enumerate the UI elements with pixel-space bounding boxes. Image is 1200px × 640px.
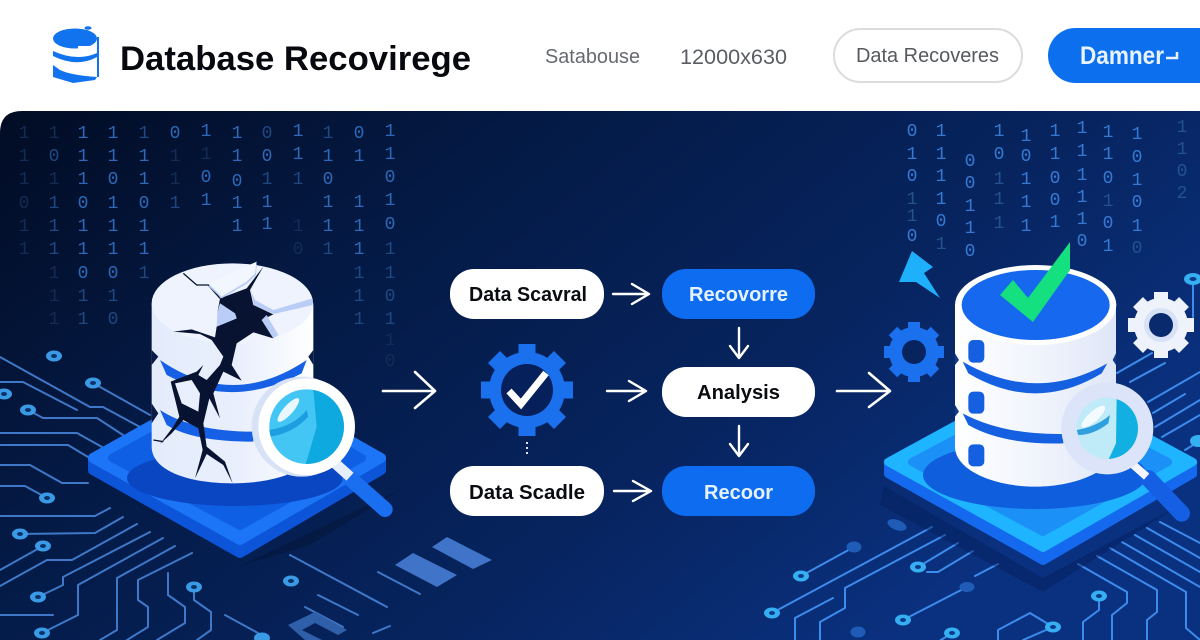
binary rain right: 1 <box>1077 188 1087 208</box>
binary rain left: 1 <box>139 124 149 144</box>
binary rain left: 1 <box>232 217 242 237</box>
binary rain right: 0 <box>1050 191 1060 211</box>
binary rain left: 1 <box>201 145 211 165</box>
binary rain left: 1 <box>293 145 303 165</box>
icon: intact database <box>955 265 1116 487</box>
binary rain right: 0 <box>936 212 946 232</box>
circuit nodes left <box>0 350 299 640</box>
blue band lower <box>160 410 253 442</box>
binary rain right: 1 <box>907 207 917 227</box>
arrow <box>614 481 651 501</box>
binary rain left: 1 <box>49 217 59 237</box>
pill: Recoor <box>662 466 815 516</box>
binary rain left: 1 <box>19 147 29 167</box>
binary rain left: 1 <box>49 310 59 330</box>
binary rain left: 1 <box>49 240 59 260</box>
binary rain right: 0 <box>1177 162 1187 182</box>
circuit nodes right <box>764 273 1200 638</box>
binary rain left: 1 <box>170 170 180 190</box>
binary rain right: 1 <box>994 214 1004 234</box>
binary rain right: 1 <box>1021 193 1031 213</box>
pill: Data Scavral: Data Scavral <box>469 284 587 306</box>
binary rain left: 1 <box>323 240 333 260</box>
binary rain left: 1 <box>139 170 149 190</box>
binary rain left: 1 <box>49 194 59 214</box>
nav label: dimensions: 12000x630 <box>680 46 787 69</box>
binary rain left: 1 <box>385 240 395 260</box>
binary rain right: 1 <box>1132 217 1142 237</box>
binary rain left: 1 <box>108 194 118 214</box>
binary rain right: 1 <box>994 190 1004 210</box>
binary rain left: 0 <box>385 352 395 372</box>
binary rain right: 1 <box>1103 123 1113 143</box>
binary rain left: 0 <box>385 287 395 307</box>
binary rain right: 0 <box>907 167 917 187</box>
binary rain right: 0 <box>1132 239 1142 259</box>
binary rain right: 1 <box>1132 171 1142 191</box>
binary rain left: 1 <box>78 217 88 237</box>
binary rain right: 1 <box>936 235 946 255</box>
blue band lower <box>963 413 1063 443</box>
binary rain right: 1 <box>1021 217 1031 237</box>
nav label: Satabouse: Satabouse <box>545 46 640 68</box>
binary rain left: 1 <box>78 124 88 144</box>
binary rain right: 1 <box>1103 237 1113 257</box>
binary rain left: 1 <box>49 124 59 144</box>
binary rain left: 1 <box>262 170 272 190</box>
binary rain left <box>19 122 395 372</box>
binary rain right: 1 <box>907 190 917 210</box>
binary rain left: 1 <box>385 264 395 284</box>
binary rain right: 1 <box>936 190 946 210</box>
binary rain right: 0 <box>1132 148 1142 168</box>
binary rain right: 1 <box>936 122 946 142</box>
binary rain left: 0 <box>232 172 242 192</box>
binary rain left: 1 <box>354 193 364 213</box>
arrow <box>837 373 890 407</box>
binary rain left: 1 <box>323 193 333 213</box>
binary rain left: 0 <box>78 264 88 284</box>
binary rain left: 0 <box>385 215 395 235</box>
pill: Recovorre: Recovorre <box>689 284 788 306</box>
icon: cracked database <box>152 262 313 483</box>
binary rain right: 1 <box>1103 145 1113 165</box>
binary rain right: 1 <box>907 145 917 165</box>
binary rain left: 1 <box>78 147 88 167</box>
binary rain left: 0 <box>262 147 272 167</box>
binary rain left: 1 <box>354 287 364 307</box>
binary rain left: 0 <box>139 194 149 214</box>
title: Database Recovirege <box>120 40 471 78</box>
binary rain left: 0 <box>19 194 29 214</box>
binary rain right: 0 <box>994 145 1004 165</box>
binary rain left: 1 <box>108 240 118 260</box>
binary rain right: 1 <box>994 170 1004 190</box>
binary rain right: 1 <box>1077 166 1087 186</box>
binary rain right: 0 <box>1103 169 1113 189</box>
binary rain right: 1 <box>1021 170 1031 190</box>
pill: Data Scadle <box>450 466 604 516</box>
pill: Data Scavral <box>450 269 604 319</box>
binary rain right: 1 <box>1021 127 1031 147</box>
binary rain left: 1 <box>232 194 242 214</box>
binary rain right: 1 <box>1050 145 1060 165</box>
binary rain left: 1 <box>201 122 211 142</box>
binary rain right: 0 <box>907 227 917 247</box>
binary rain left: 1 <box>232 147 242 167</box>
arrow <box>607 381 646 401</box>
binary rain left: 1 <box>78 287 88 307</box>
binary rain left: 1 <box>170 194 180 214</box>
filled button <box>1048 28 1200 83</box>
binary rain left: 1 <box>19 124 29 144</box>
binary rain left: 1 <box>293 122 303 142</box>
binary rain left: 1 <box>354 264 364 284</box>
circuit traces left <box>0 357 420 640</box>
binary rain left: 1 <box>78 240 88 260</box>
icon: magnifier right <box>1061 382 1182 513</box>
binary rain right: 1 <box>1103 192 1113 212</box>
binary rain right: 1 <box>994 122 1004 142</box>
blue band upper <box>160 360 307 392</box>
binary rain left: 1 <box>354 147 364 167</box>
binary rain left: 1 <box>354 310 364 330</box>
binary rain left: 1 <box>78 310 88 330</box>
binary rain right: 1 <box>965 197 975 217</box>
binary rain right: 0 <box>965 174 975 194</box>
binary rain left: 0 <box>108 310 118 330</box>
binary rain right: 1 <box>936 167 946 187</box>
binary rain left: 1 <box>323 147 333 167</box>
binary rain right: 1 <box>1177 140 1187 160</box>
binary rain left: 1 <box>49 287 59 307</box>
filled button: Damner <box>1080 42 1164 70</box>
binary rain left: 1 <box>49 264 59 284</box>
binary rain left: 1 <box>139 217 149 237</box>
binary rain right: 0 <box>1103 214 1113 234</box>
binary rain left: 0 <box>385 168 395 188</box>
binary rain left: 1 <box>108 287 118 307</box>
dotted connector <box>526 442 528 456</box>
binary rain left: 1 <box>108 124 118 144</box>
binary rain right: 2 <box>1177 184 1187 204</box>
broken shard <box>175 380 200 412</box>
binary rain right: 1 <box>1050 213 1060 233</box>
binary rain left: 1 <box>293 170 303 190</box>
icon: database logo <box>53 26 99 83</box>
binary rain right: 1 <box>936 145 946 165</box>
binary rain left: 1 <box>385 191 395 211</box>
binary rain right: 0 <box>965 152 975 172</box>
pill: Recoor: Recoor <box>704 482 773 504</box>
binary rain left: 1 <box>385 331 395 351</box>
binary rain left: 0 <box>354 124 364 144</box>
crack shard shading <box>208 264 313 338</box>
arrow <box>613 284 649 304</box>
binary rain left: 1 <box>354 240 364 260</box>
binary rain right: 1 <box>1077 210 1087 230</box>
binary rain left: 0 <box>201 168 211 188</box>
crack fissures <box>160 267 273 483</box>
binary rain right: 1 <box>1077 142 1087 162</box>
binary rain right: 1 <box>965 219 975 239</box>
binary rain left: 1 <box>354 217 364 237</box>
icon: blue gear <box>884 322 944 382</box>
binary rain left: 1 <box>201 191 211 211</box>
binary rain right: 1 <box>1132 125 1142 145</box>
pill: Analysis <box>662 367 815 417</box>
binary rain right: 1 <box>1050 122 1060 142</box>
binary rain left: 0 <box>293 240 303 260</box>
binary rain right: 0 <box>1021 147 1031 167</box>
binary rain right: 1 <box>1077 119 1087 139</box>
binary rain left: 1 <box>139 147 149 167</box>
binary rain left: 1 <box>385 145 395 165</box>
binary rain left: 1 <box>139 264 149 284</box>
platform: damaged database base <box>93 377 400 566</box>
icon: white gear <box>1128 292 1194 358</box>
icon: gear with check <box>481 344 573 436</box>
blue band upper <box>963 362 1107 393</box>
binary rain left: 1 <box>262 215 272 235</box>
outline button <box>834 29 1022 82</box>
binary rain left: 0 <box>170 124 180 144</box>
binary rain left: 0 <box>262 124 272 144</box>
binary rain right: 1 <box>1177 118 1187 138</box>
binary rain left: 1 <box>385 310 395 330</box>
binary rain left: 1 <box>170 147 180 167</box>
binary rain left: 1 <box>262 193 272 213</box>
binary rain left: 1 <box>139 240 149 260</box>
binary rain right: 0 <box>1050 169 1060 189</box>
drive slots <box>968 340 984 466</box>
arrow: into workflow <box>383 372 435 408</box>
binary rain left: 1 <box>232 124 242 144</box>
binary rain left: 1 <box>19 240 29 260</box>
icon: cursor arrow <box>899 251 940 298</box>
binary rain left: 0 <box>323 170 333 190</box>
pill: Analysis: Analysis <box>697 382 780 404</box>
binary rain right: 0 <box>965 242 975 262</box>
arrow <box>730 426 748 456</box>
icon: magnifier left <box>252 377 385 509</box>
arrow <box>730 328 748 358</box>
binary rain left: 1 <box>323 217 333 237</box>
platform: recovered database base <box>880 379 1193 592</box>
binary rain left: 1 <box>108 217 118 237</box>
circuit chip marks <box>288 537 492 640</box>
binary rain left: 0 <box>108 264 118 284</box>
binary rain left: 1 <box>108 147 118 167</box>
binary rain right <box>907 118 1187 262</box>
outline button: Data Recoveres <box>856 45 999 67</box>
binary rain left: 1 <box>49 170 59 190</box>
circuit traces right <box>772 282 1200 640</box>
pill: Recovorre <box>662 269 815 319</box>
binary rain right: 0 <box>1132 193 1142 213</box>
binary rain left: 0 <box>49 147 59 167</box>
binary rain left: 1 <box>19 170 29 190</box>
pill: Data Scadle: Data Scadle <box>469 482 585 504</box>
binary rain left: 1 <box>323 124 333 144</box>
binary rain left: 1 <box>293 217 303 237</box>
binary rain left: 1 <box>19 217 29 237</box>
binary rain left: 1 <box>385 122 395 142</box>
binary rain left: 0 <box>78 194 88 214</box>
header bar <box>0 0 1200 112</box>
binary rain left: 1 <box>78 170 88 190</box>
binary rain right: 0 <box>907 122 917 142</box>
binary rain right: 0 <box>1077 232 1087 252</box>
icon: green check <box>1000 242 1070 322</box>
binary rain left: 0 <box>108 170 118 190</box>
